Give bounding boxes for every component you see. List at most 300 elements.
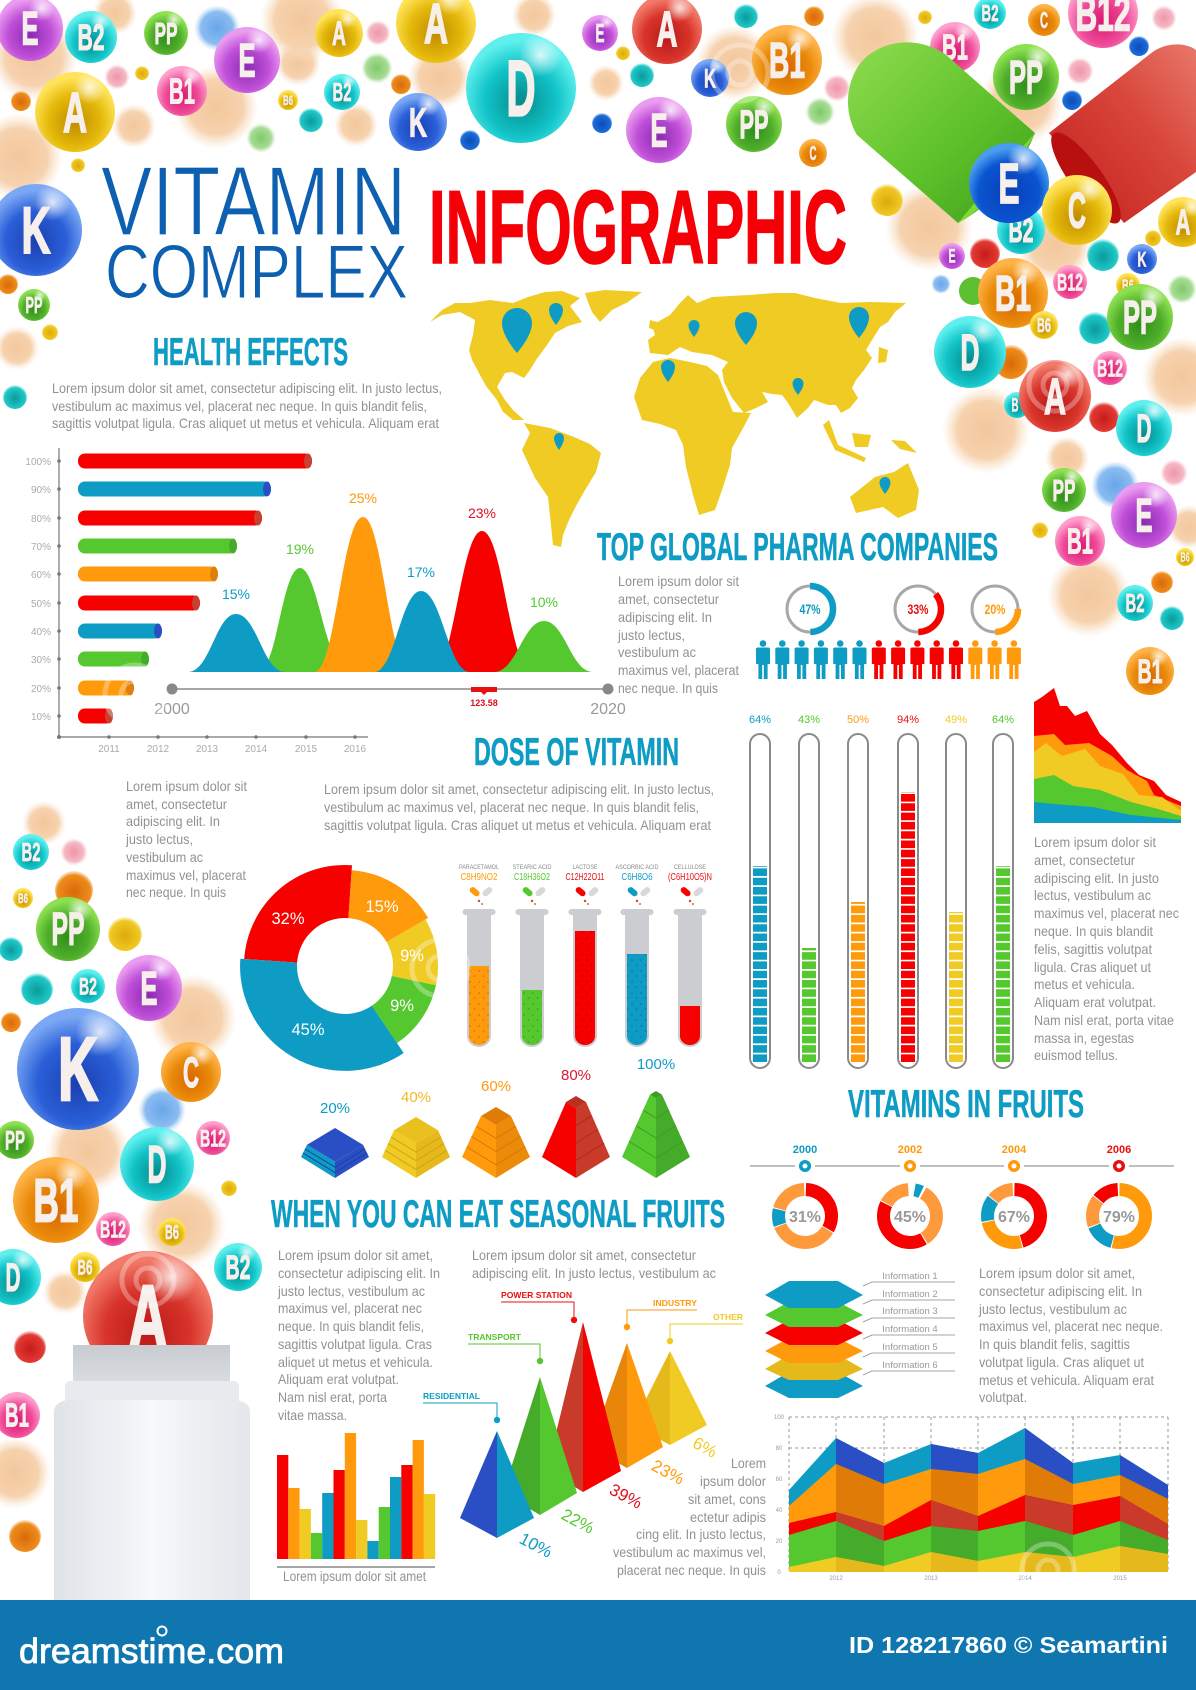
icon: ball C: [161, 1042, 221, 1102]
icon: ball B2: [214, 1243, 262, 1291]
text block: right column: adipiscing elit. In justo: [1034, 870, 1159, 886]
text block: seasonal right aligned: sit amet, cons: [688, 1491, 766, 1507]
pyramid 40%: 40%: [401, 1089, 431, 1106]
icon: ball B12: B12: [1097, 356, 1123, 382]
chart axis labels: 20: [776, 1539, 783, 1545]
icon: ball B2: [65, 11, 117, 63]
text block: fruits: In quis blandit felis, sagittis: [979, 1336, 1130, 1352]
chart: bell curve mountains: [188, 490, 593, 672]
tube: paracetamol: C8H9NO2: [460, 872, 498, 883]
ring 20%: [972, 586, 1018, 632]
text block: seasonal left: Lorem ipsum dolor sit amet,: [278, 1247, 433, 1263]
icon: ball B1: [13, 1157, 99, 1243]
icon: ball E: E: [948, 246, 956, 268]
icon: ball E: [1111, 482, 1177, 548]
icon: ball K: [691, 59, 729, 97]
text block: seasonal left: aliquet ut metus et vehicula.: [278, 1354, 433, 1370]
donut percent labels: 67%: [998, 1209, 1030, 1226]
x axis labels: 2012: [147, 744, 170, 755]
chart grid: [789, 1417, 1168, 1572]
icon: ball C: C: [1068, 182, 1086, 238]
icon: ball PP: PP: [52, 903, 84, 955]
y axis labels: 90%: [31, 485, 51, 496]
curve labels: 17%: [407, 564, 435, 580]
icon: ball A red on bottle: A: [128, 1266, 168, 1370]
icon: ball K: K: [1138, 248, 1146, 272]
title: Vitamin Complex: [101, 146, 408, 315]
icon: ball B1: B1: [1067, 520, 1093, 562]
area bands dark folds: [836, 1428, 1168, 1572]
tube: paracetamol: [459, 865, 500, 1047]
text block: dose left column: adipiscing elit. In: [126, 813, 220, 829]
donut percent labels: 45%: [894, 1209, 926, 1226]
bars: [78, 454, 312, 724]
icon: ball PP: [18, 289, 50, 321]
information leader lines: [863, 1282, 955, 1375]
icon: ball B1: [752, 25, 822, 95]
pyramid 80%: [542, 1067, 610, 1178]
text block: dose: Lorem ipsum dolor sit amet, consectetur adipiscing elit. In justo lectus,: [324, 781, 714, 797]
icon: ball B12: [1068, 0, 1138, 48]
icon: ball B12: [96, 1212, 130, 1246]
pyramid percent labels: 22%: [558, 1505, 597, 1538]
icon: ball B2 behind capsule: [997, 206, 1045, 254]
icon: ball K: K: [704, 64, 716, 94]
icon: ball D: [1116, 400, 1172, 456]
icon: ball D: D: [960, 324, 980, 381]
icon: ball B6: [1116, 273, 1140, 297]
chart axis labels: 80: [776, 1446, 783, 1452]
icon: ball A red: [1019, 360, 1091, 432]
text block: fruits: consectetur adipiscing elit. In: [979, 1283, 1142, 1299]
donut row: yearly shares: [778, 1190, 1146, 1242]
icon: ball PP: [1042, 468, 1086, 512]
gauge 64%: 64%: [749, 714, 771, 726]
y axis labels: 80%: [31, 514, 51, 525]
pyramid 100%: 100%: [637, 1056, 675, 1073]
icon: ball E: [582, 15, 618, 51]
icon: ball A: A: [332, 15, 346, 53]
pyramid percent labels: 23%: [648, 1456, 687, 1489]
icon: ball K large: [0, 184, 82, 276]
text block: right column: maximus vel, placerat nec: [1034, 905, 1179, 921]
chart axis labels: 2014: [1018, 1576, 1032, 1582]
gauge 43%: [798, 714, 820, 1068]
text block: right column: felis, sagittis volutpat: [1034, 941, 1152, 957]
icon: ball E: [939, 243, 965, 269]
information labels: Information 1: [882, 1271, 938, 1282]
icon: ball A red on bottle: [83, 1251, 213, 1381]
title: Vitamin Complex: VITAMIN: [101, 146, 406, 256]
text block: fruits: justo lectus, vestibulum ac: [978, 1301, 1127, 1317]
icon: ball B2: [324, 74, 360, 110]
gauge 43%: 43%: [798, 714, 820, 726]
icon: ball B: B: [1012, 396, 1018, 416]
information labels: Information 3: [882, 1306, 938, 1317]
icon: ball B12: B12: [200, 1126, 226, 1152]
pyramid: other: [633, 1351, 707, 1445]
text block: right column: amet, consectetur: [1034, 852, 1135, 868]
area bands light: [789, 1428, 1168, 1572]
text block: seasonal left: neque. In quis blandit felis,: [278, 1318, 424, 1334]
icon: ball A: [396, 0, 476, 63]
text block: dose: vestibulum ac maximus vel, placerat nec neque. In quis blandit felis,: [324, 799, 699, 815]
text block: dose left column: nec neque. In quis: [126, 884, 226, 900]
text block: seasonal right aligned: vestibulum ac maximus vel,: [613, 1544, 766, 1560]
icon: ball B: [1004, 392, 1030, 418]
gauge 94%: [897, 714, 919, 1068]
icon: ball C: C: [810, 143, 816, 165]
icon: ball B12: [1053, 265, 1087, 299]
text block: seasonal left: maximus vel, placerat nec: [278, 1300, 422, 1316]
text block: right column: lectus, vestibulum ac: [1034, 887, 1151, 903]
tube: cellulose: [668, 865, 712, 1047]
thermometer bar gauges: [749, 714, 1014, 1068]
pyramid 20%: 20%: [320, 1100, 350, 1117]
heading: when you can eat seasonal fruits: WHEN YOU CAN EAT SEASONAL FRUITS: [271, 1193, 725, 1236]
icon: ball E blue: E: [998, 152, 1020, 216]
icon: ball B2: B2: [22, 837, 40, 867]
donut labels: 9%: [400, 947, 424, 965]
text block: seasonal left: justo lectus, vestibulum ac: [277, 1283, 425, 1299]
icon: ball C: [1042, 175, 1112, 245]
icon: ball D: [466, 33, 576, 143]
curve labels: [222, 490, 558, 610]
icon: ball B12: B12: [100, 1216, 126, 1244]
text block: seasonal top: adipiscing elit. In justo lectus, vestibulum ac: [472, 1265, 716, 1281]
icon: ball B1: [1126, 647, 1174, 695]
callout: power station: [501, 1290, 577, 1323]
icon: ball E: E: [1136, 488, 1152, 542]
icon: ball B12: [1093, 351, 1127, 385]
icon: ball D: D: [506, 44, 536, 132]
pyramid: residential: [460, 1431, 534, 1538]
text block: dose left column: maximus vel, placerat: [126, 867, 246, 883]
vitamin balls top centre: [582, 0, 827, 167]
gauge 49%: [945, 714, 967, 1068]
year timeline: 2006: [1107, 1144, 1131, 1156]
x axis labels: 2015: [295, 744, 318, 755]
icon: ball A: [1158, 197, 1196, 247]
text block: dose left column: amet, consectetur: [126, 796, 227, 812]
chart axis labels: 60: [776, 1477, 783, 1483]
bar chart: horizontal percent bars: [25, 448, 368, 755]
icon: ball D: D: [6, 1256, 20, 1300]
icon: ball B1: [1055, 516, 1105, 566]
text block: seasonal left: Nam nisl erat, porta: [278, 1389, 387, 1405]
text block: fruits: volutpat ligula. Cras aliquet ut: [979, 1354, 1144, 1370]
text block: fruits: metus et vehicula. Aliquam erat: [979, 1372, 1154, 1388]
icon: ball PP: PP: [1009, 50, 1043, 104]
donut chart: [240, 865, 438, 1071]
text block: dose left column: vestibulum ac: [126, 849, 203, 865]
y axis labels: 100%: [25, 457, 51, 468]
text block: right column: neque. In quis blandit: [1034, 923, 1153, 939]
gauge 94%: 94%: [897, 714, 919, 726]
donut 67%: [988, 1190, 1040, 1242]
icon: ball A: [315, 9, 363, 57]
icon: ball E blue: [969, 143, 1049, 223]
icon: ball B2: B2: [226, 1249, 250, 1287]
bar chart caption: Lorem ipsum dolor sit amet: [283, 1568, 426, 1584]
gauge 64%: [749, 714, 771, 1068]
curve labels: 25%: [349, 490, 377, 506]
y axis labels: 10%: [31, 712, 51, 723]
icon: ball PP: PP: [5, 1126, 25, 1156]
heading: dose of vitamin: DOSE OF VITAMIN: [474, 731, 679, 774]
icon: ball A: [632, 0, 702, 64]
text block: seasonal left: sagittis volutpat ligula. Cras: [278, 1336, 432, 1352]
icon: ball K large: K: [22, 193, 51, 267]
chart axis labels: 0: [777, 1570, 781, 1576]
vitamin balls lower left: [0, 834, 262, 1600]
icon: ball B1: B1: [942, 26, 968, 68]
text block: right column: ligula. Cras aliquet ut: [1034, 959, 1151, 975]
text block: fruits: maximus vel, placerat nec neque.: [979, 1318, 1163, 1334]
text block: seasonal right aligned: placerat nec neque. In quis: [617, 1562, 766, 1578]
text block: seasonal left: consectetur adipiscing elit. In: [278, 1265, 440, 1281]
icon: ball B6: [278, 90, 298, 110]
people pictogram row: [756, 640, 1021, 679]
tube: cellulose: (C6H10O5)N: [668, 872, 712, 883]
pyramid percent labels: 10%: [516, 1529, 555, 1562]
footer logo: dreamstime: dreamstime.com: [19, 1632, 284, 1671]
tube: stearic acid: [512, 865, 552, 1047]
text block: seasonal left: vitae massa.: [278, 1407, 347, 1423]
text block: seasonal right aligned: Lorem: [731, 1455, 766, 1471]
icon: ball E: E: [22, 2, 38, 54]
tube: ascorbic acid: ASCORBIC ACID: [616, 865, 659, 871]
text block: pharma: Lorem ipsum dolor sit: [618, 573, 739, 589]
year timeline: 2002: [898, 1144, 922, 1156]
callout: residential: RESIDENTIAL: [423, 1391, 480, 1401]
timeline slider 2000-2020: 2020: [590, 701, 626, 718]
icon: ball PP: PP: [1052, 473, 1076, 508]
icon: ball B6: [70, 1252, 100, 1282]
gauge 49%: 49%: [945, 714, 967, 726]
gauge 64%: 64%: [992, 714, 1014, 726]
donut labels: 9%: [390, 997, 414, 1015]
curve labels: 23%: [468, 505, 496, 521]
text block: health effects: sagittis volutpat ligula. Cras aliquet ut metus et vehicula. Aliquam erat: [52, 415, 439, 431]
icon: ball D: D: [148, 1136, 166, 1194]
x axis labels: 2014: [245, 744, 268, 755]
y axis labels: 70%: [31, 542, 51, 553]
pyramid 100%: [622, 1056, 690, 1178]
y axis labels: 20%: [31, 684, 51, 695]
icon: ball B2: B2: [1126, 588, 1144, 618]
chart axis labels: 2012: [829, 1576, 843, 1582]
icon: green capsule half: [848, 42, 1035, 223]
icon: ball E: [0, 0, 63, 61]
timeline slider 2000-2020: 2000: [154, 701, 190, 718]
tube: stearic acid: STEARIC ACID: [512, 865, 552, 871]
watermark swirls: [105, 45, 1081, 1596]
icon: ball D: D: [1136, 407, 1152, 451]
ring 20%: 20%: [984, 601, 1006, 617]
isometric pyramids row: [301, 1056, 690, 1178]
ring charts: pharma shares: [787, 586, 1018, 632]
chart axis labels: 40: [776, 1508, 783, 1514]
information labels: [882, 1271, 938, 1371]
icon: ball PP: [0, 1121, 34, 1159]
timeline slider 2000-2020: [154, 684, 626, 718]
icon: ball B1: [0, 1392, 40, 1438]
text block: fruits: Lorem ipsum dolor sit amet,: [979, 1265, 1135, 1281]
text block: fruits: volutpat.: [979, 1389, 1027, 1405]
x axis labels: 2013: [196, 744, 219, 755]
icon: ball K: K: [409, 100, 427, 146]
footer bar: [0, 1600, 1196, 1690]
text block: pharma: vestibulum ac: [618, 644, 696, 660]
icon: ball B6: B6: [78, 1256, 92, 1280]
curve labels: 10%: [530, 594, 558, 610]
icon: ball B2: B2: [332, 77, 352, 107]
chart axis labels: 2015: [1113, 1576, 1127, 1582]
chart: stacked jagged area: [1034, 688, 1181, 823]
icon: ball B12: B12: [1057, 270, 1083, 296]
text block: right column: massa in, egestas: [1034, 1030, 1134, 1046]
icon: ball B6: B6: [283, 92, 293, 108]
text block: seasonal top: [472, 1247, 716, 1281]
callout: transport: TRANSPORT: [468, 1332, 522, 1342]
y axis labels: 60%: [31, 570, 51, 581]
icon: ball E: E: [650, 104, 668, 156]
vitamin balls top right: [848, 0, 1196, 695]
icon: ball K large: K: [58, 1020, 98, 1120]
text block: dose: sagittis volutpat ligula. Cras aliquet ut metus et vehicula. Aliquam erat: [324, 817, 711, 833]
heading: health effects: HEALTH EFFECTS: [153, 331, 348, 374]
icon: ball PP: [726, 96, 782, 152]
footer credit: ID 128217860 © Seamartini: [849, 1632, 1168, 1658]
callout: industry: INDUSTRY: [653, 1298, 697, 1308]
icon: ball PP: PP: [154, 16, 178, 51]
year timeline: [750, 1144, 1174, 1176]
text block: seasonal top: Lorem ipsum dolor sit amet, consectetur: [472, 1247, 696, 1263]
vitamin balls top left: [0, 0, 576, 321]
icon: ball B12: [196, 1121, 230, 1155]
pyramid 20%: [301, 1100, 369, 1178]
x axis labels: [98, 744, 367, 755]
tube: paracetamol: PARACETAMOL: [459, 865, 500, 871]
icon: ball C: [799, 139, 827, 167]
callout: other: OTHER: [713, 1312, 743, 1322]
icon: ball E: [116, 955, 182, 1021]
icon: ball B6: B6: [1037, 315, 1051, 337]
text block: seasonal right aligned: cing elit. In justo lectus,: [636, 1526, 766, 1542]
icon: ball B1: B1: [1138, 653, 1162, 691]
pyramid: industry: [590, 1343, 663, 1468]
tube: ascorbic acid: C6H8O6: [622, 872, 653, 883]
text block: pharma: justo lectus,: [617, 627, 685, 643]
gauge 50%: [847, 714, 869, 1068]
text block: pharma: nec neque. In quis: [618, 680, 718, 696]
year timeline: 2000: [793, 1144, 817, 1156]
icon: ball B6: B6: [1122, 276, 1134, 295]
icon: ball B1: B1: [995, 266, 1031, 322]
icon: ball B6: B6: [165, 1222, 179, 1244]
text block: right column: Aliquam erat volutpat.: [1034, 994, 1156, 1010]
information labels: Information 4: [882, 1324, 938, 1335]
donut 45%: [884, 1190, 936, 1242]
icon: ball E: E: [140, 962, 158, 1014]
y axis labels: 30%: [31, 655, 51, 666]
tube: lactose: [566, 865, 605, 1047]
pyramid: transport: [503, 1377, 577, 1515]
text block: right column: [1034, 834, 1179, 1063]
icon: ball C: C: [1040, 7, 1048, 33]
y axis labels: [25, 457, 51, 723]
icon: ball B6: [1030, 311, 1058, 339]
icon: ball D: [0, 1249, 41, 1305]
pyramid: power station: [547, 1322, 621, 1492]
icon: ball B1: [978, 258, 1048, 328]
year timeline: 2004: [1002, 1144, 1027, 1156]
icon: ball D: [120, 1127, 194, 1201]
icon: ball B2 behind capsule: B2: [1008, 212, 1034, 250]
y axis labels: 50%: [31, 599, 51, 610]
text block: health effects: [52, 380, 442, 431]
icon: ball B1: B1: [5, 1396, 29, 1434]
donut percent labels: 79%: [1103, 1209, 1135, 1226]
callout: transport: [468, 1332, 543, 1364]
callout: other: [667, 1312, 743, 1344]
text block: seasonal left: Aliquam erat volutpat.: [278, 1371, 399, 1387]
pyramid 60%: 60%: [481, 1078, 511, 1095]
ring 47%: 47%: [800, 601, 821, 617]
information labels: Information 2: [882, 1289, 938, 1300]
donut percent labels: 31%: [789, 1209, 821, 1226]
ring 47%: [787, 586, 833, 632]
text block: health effects: vestibulum ac maximus vel, placerat nec neque. In quis blandit felis,: [52, 398, 427, 414]
x axis labels: 2011: [98, 744, 120, 755]
donut labels: [271, 898, 424, 1039]
text block: seasonal right aligned: ectetur adipis: [690, 1509, 766, 1525]
pyramid 80%: 80%: [561, 1067, 591, 1084]
donut percent labels: [789, 1209, 1135, 1226]
donut 31%: [778, 1190, 832, 1242]
donut labels: 15%: [365, 898, 399, 916]
icon: ball E: E: [238, 34, 256, 86]
icon: ball E: [214, 27, 280, 93]
text block: pharma: [617, 573, 739, 696]
title: Infographic: INFOGRAPHIC: [429, 170, 847, 286]
callout: residential: [423, 1391, 500, 1423]
tube: lactose: LACTOSE: [572, 865, 598, 871]
donut labels: 45%: [291, 1021, 325, 1039]
icon: ball B6: [1176, 548, 1194, 566]
text block: seasonal right aligned: [613, 1455, 766, 1578]
icon: red capsule half: [1041, 44, 1196, 232]
text block: dose left column: Lorem ipsum dolor sit: [126, 778, 247, 794]
world map with pins: [430, 290, 919, 547]
icon: ball B2: B2: [78, 17, 104, 58]
donut labels: 32%: [271, 910, 305, 928]
icon: ball K: [389, 93, 447, 151]
icon: ball A red: A: [1044, 368, 1066, 425]
ring 33%: [895, 586, 941, 632]
information labels: Information 5: [882, 1342, 938, 1353]
chart: folded stacked area: [774, 1415, 1168, 1582]
icon: ball B1: [930, 22, 980, 72]
map: location pins: [502, 303, 890, 494]
pyramid 60%: [462, 1078, 530, 1178]
donut 79%: [1092, 1190, 1146, 1242]
text block: dose left column: [125, 778, 247, 900]
icon: ball C: C: [183, 1049, 199, 1097]
icon: ball A: A: [63, 81, 87, 145]
icon: ball B1: B1: [769, 32, 805, 88]
